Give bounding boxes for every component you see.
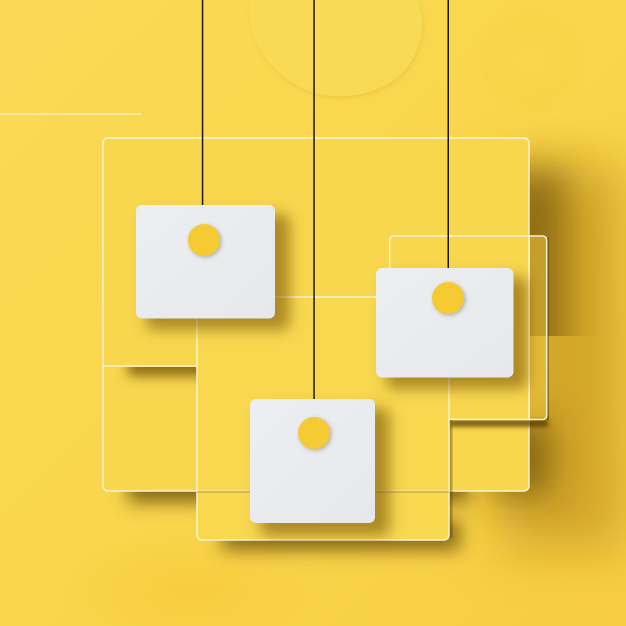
- line: centre connector: [313, 0, 315, 399]
- frame shadow: bottom: [128, 472, 468, 502]
- horizontal accent line: [0, 114, 141, 115]
- icon: yellow dot: [298, 417, 332, 450]
- frame shadow: lower right: [490, 420, 550, 495]
- right edge of large frame: [528, 236, 530, 420]
- divider shadow: [128, 358, 208, 376]
- icon: yellow dot: [432, 282, 466, 316]
- lower edge of large frame crossing centre frame: [197, 490, 449, 492]
- card: right: [376, 268, 528, 389]
- frame shadow: broad right tint: [500, 165, 625, 550]
- line: right connector: [448, 0, 449, 268]
- background blob: [249, 0, 423, 98]
- icon: yellow dot: [188, 224, 222, 258]
- panel: centre frame: [197, 297, 460, 550]
- card: bottom: [250, 399, 390, 536]
- frame shadow: upper right: [530, 145, 584, 336]
- inner divider: [104, 365, 198, 367]
- panel: right frame: [390, 236, 549, 427]
- panel: large frame: [103, 138, 625, 550]
- card: top left: [136, 205, 290, 330]
- line: left connector: [202, 0, 203, 205]
